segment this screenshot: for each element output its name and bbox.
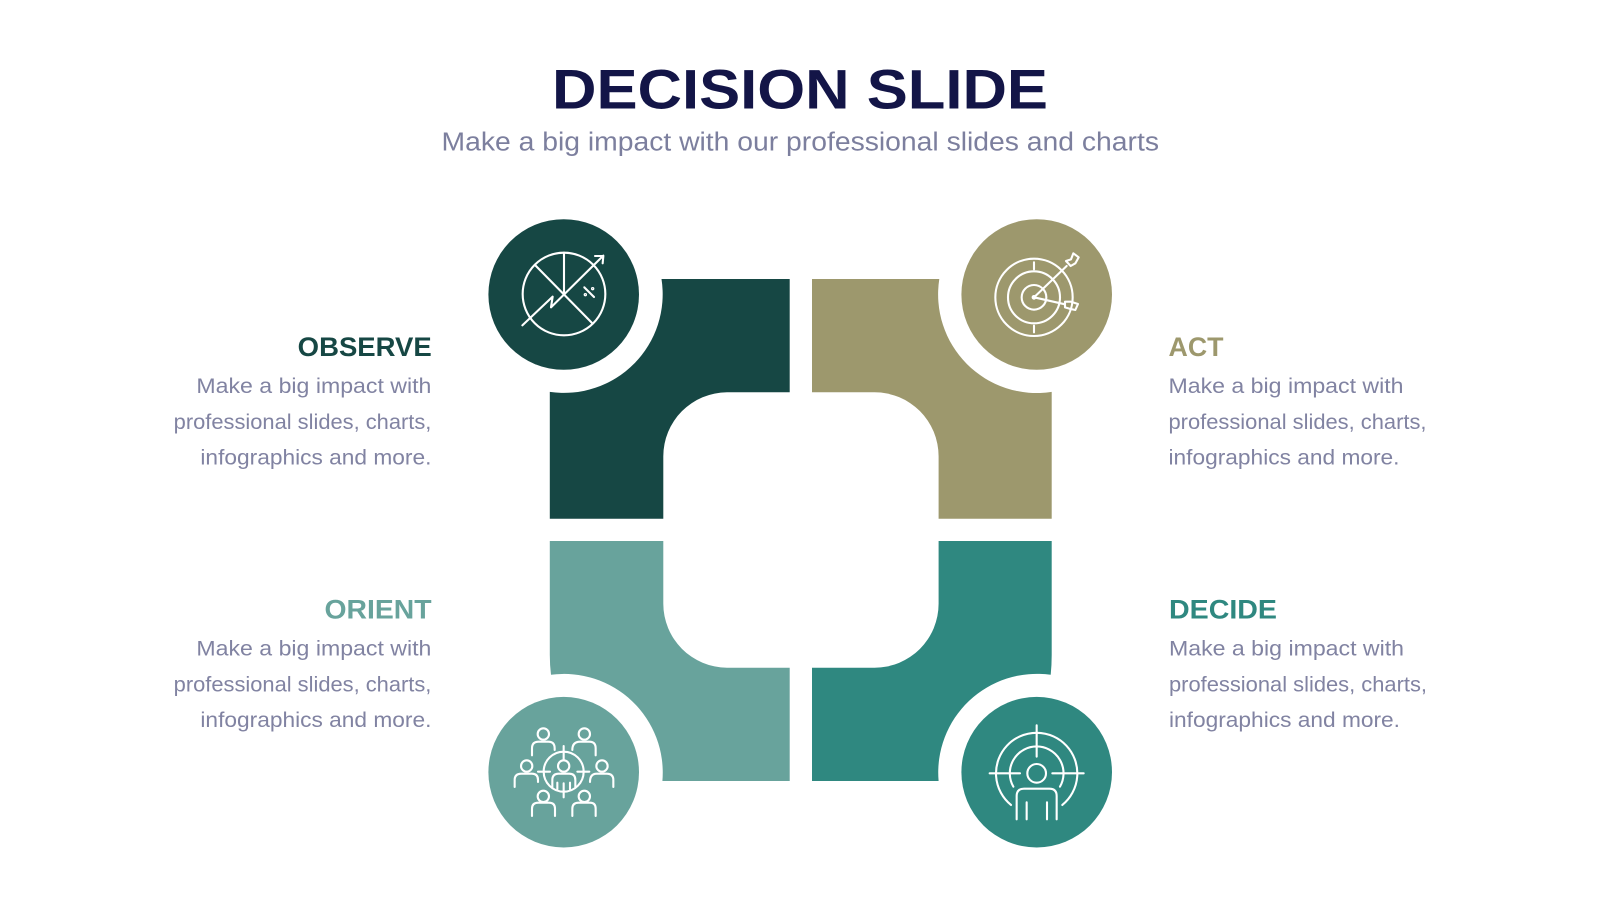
body: decide: Make a big impact with [1169,638,1404,660]
panel: act segment [812,279,1052,519]
heading: observe: OBSERVE [298,332,432,362]
heading: orient: ORIENT [324,594,432,624]
icon: act target with arrows [961,219,1112,370]
body: decide: infographics and more. [1169,709,1400,732]
panel: observe segment [550,279,790,519]
text block: act [1168,332,1426,470]
body: observe: infographics and more. [200,446,431,470]
body: orient: Make a big impact with [196,638,431,660]
heading: decide: DECIDE [1169,594,1277,624]
text block: decide [1169,594,1427,732]
title: DECISION SLIDE [552,58,1048,120]
body: orient: professional slides, charts, [174,674,431,696]
body: observe: professional slides, charts, [174,411,431,434]
panel: orient segment [550,541,790,781]
body: decide [1169,638,1427,732]
heading: act: ACT [1168,332,1224,362]
icon: decide person in crosshair [961,697,1112,848]
body: act: professional slides, charts, [1168,411,1426,434]
panel: decide segment [812,541,1052,781]
icon: orient group with target [488,697,639,848]
body: observe [174,375,431,470]
body: orient [174,638,431,732]
subtitle: Make a big impact with our professional slides and charts [442,128,1159,156]
icon: observe pie chart with arrow [488,219,639,370]
body: observe: Make a big impact with [196,375,431,398]
body: orient: infographics and more. [200,709,431,732]
body: act: infographics and more. [1168,446,1400,470]
body: act: Make a big impact with [1168,375,1404,398]
text block: orient [174,594,431,732]
body: act [1168,375,1426,470]
body: decide: professional slides, charts, [1169,674,1427,696]
text block: observe [174,332,432,470]
